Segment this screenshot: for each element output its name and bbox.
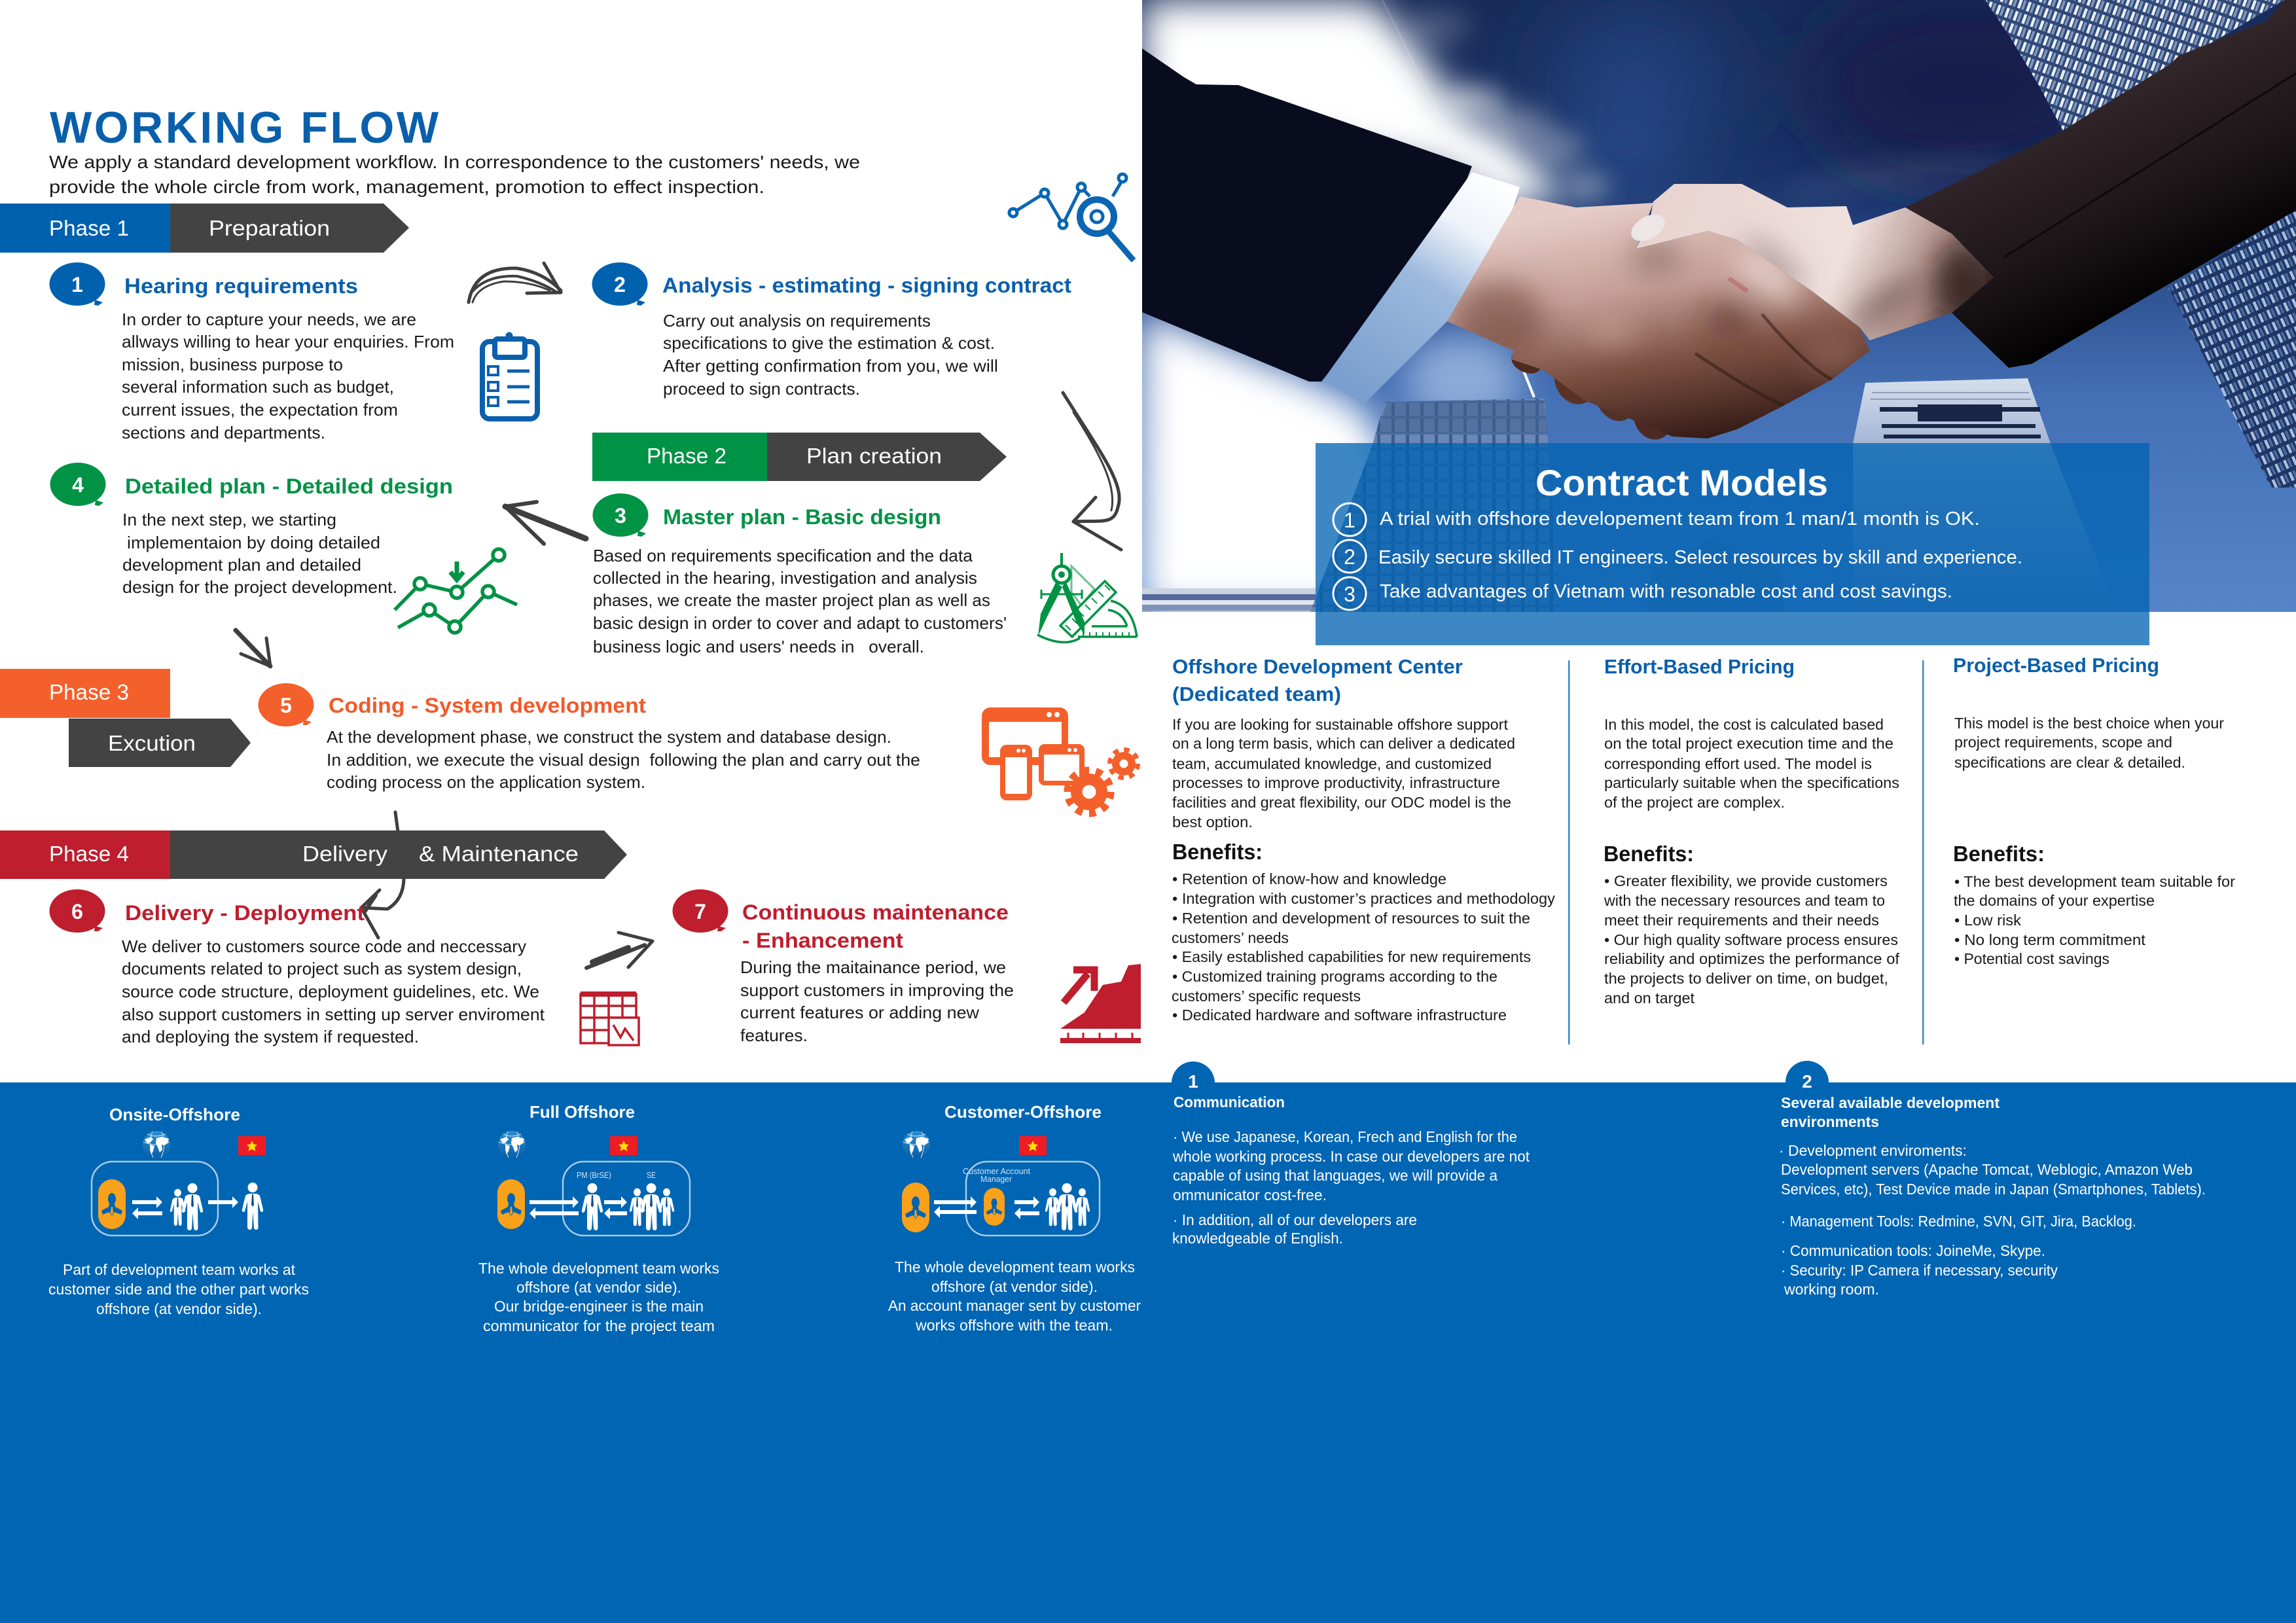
- body 1: [122, 310, 454, 442]
- phase 1 bar: Phase 1: [49, 216, 129, 240]
- body 3: [593, 546, 1007, 656]
- caption: customer side and the other part works: [48, 1281, 309, 1298]
- body 1: mission, business purpose to: [122, 355, 343, 374]
- description: corresponding effort used. The model is: [1604, 755, 1872, 772]
- item 2: Easily secure skilled IT engineers. Select resources by skill and experience.: [1378, 547, 2022, 568]
- boundary: [563, 1162, 690, 1236]
- phase 4 bar: Phase 4: [49, 842, 129, 866]
- item 2: [1333, 540, 2022, 573]
- text: knowledgeable of English.: [1172, 1230, 1343, 1247]
- right hand: [1636, 184, 1994, 340]
- intro text: provide the whole circle from work, management, promotion to effect inspection.: [49, 177, 764, 197]
- panel: blue footer band: [0, 1061, 2296, 1623]
- benefits list: • Potential cost savings: [1954, 950, 2109, 967]
- phase 4 bar: [0, 830, 627, 879]
- badge 2: [592, 262, 648, 306]
- body 2: proceed to sign contracts.: [663, 379, 860, 399]
- flag: [610, 1136, 637, 1155]
- globe: [143, 1131, 170, 1158]
- globe: [498, 1131, 526, 1158]
- benefits list: • Dedicated hardware and software infrastructure: [1172, 1007, 1507, 1024]
- caption: Our bridge-engineer is the main: [494, 1298, 704, 1315]
- body 4: design for the project development.: [122, 577, 397, 597]
- body 6: also support customers in setting up server enviroment: [122, 1005, 545, 1024]
- benefits list: [1172, 870, 1556, 1024]
- low building: [1142, 588, 1316, 611]
- diagram: onsite-offshore: [48, 1105, 309, 1317]
- description: If you are looking for sustainable offshore support: [1172, 716, 1509, 733]
- text: working room.: [1784, 1281, 1879, 1298]
- heading 3: Master plan - Basic design: [663, 505, 941, 529]
- item 1: 1: [1344, 508, 1355, 532]
- customer pill: [902, 1183, 929, 1232]
- text: · Management Tools: Redmine, SVN, GIT, Jira, Backlog.: [1781, 1213, 2136, 1230]
- body 7: current features or adding new: [740, 1003, 979, 1022]
- icon: line chart: [395, 549, 517, 633]
- phase 2 bar: Plan creation: [806, 444, 942, 468]
- role labels: Manager: [980, 1174, 1013, 1184]
- description: specifications are clear & detailed.: [1954, 754, 2185, 771]
- photo: handshake over skyscrapers: [1142, 0, 2296, 612]
- role labels: [963, 1166, 1030, 1184]
- item 3: 3: [1344, 582, 1355, 606]
- step 5: coding: [258, 683, 920, 792]
- text: · Communication tools: JoineMe, Skype.: [1781, 1242, 2045, 1259]
- customer pill: [497, 1179, 525, 1229]
- arrow: step 5 to step 6: [361, 812, 404, 938]
- body 1: current issues, the expectation from: [122, 400, 398, 419]
- heading 7: [742, 901, 1009, 952]
- icon: table with chart: [581, 994, 639, 1045]
- mid towers: [1310, 399, 1560, 612]
- icon: growth chart: [1060, 964, 1141, 1043]
- badge 7: 7: [694, 900, 706, 923]
- role labels: SE: [647, 1170, 656, 1180]
- arrows: [132, 1196, 238, 1219]
- body 3: phases, we create the master project plan as well as: [593, 590, 990, 610]
- onsite engineer: [242, 1183, 263, 1230]
- panel: contract models: [1316, 443, 2149, 645]
- intro text: [49, 152, 860, 197]
- icon: drafting tools: [1037, 553, 1137, 642]
- benefits heading: Benefits:: [1172, 840, 1263, 864]
- description: processes to improve productivity, infrastructure: [1172, 774, 1500, 791]
- caption: offshore (at vendor side).: [96, 1300, 262, 1317]
- body 2: specifications to give the estimation & cost.: [663, 333, 995, 353]
- body 7: [740, 957, 1014, 1045]
- body 1: sections and departments.: [122, 423, 325, 442]
- caption: offshore (at vendor side).: [516, 1279, 681, 1296]
- badge 7: [673, 889, 728, 933]
- caption: Part of development team works at: [63, 1261, 296, 1278]
- step 7: maintenance: [673, 889, 1014, 1045]
- text: Services, etc), Test Device made in Japan (Smartphones, Tablets).: [1781, 1181, 2206, 1198]
- phase 3 bar: Excution: [108, 731, 196, 755]
- heading 1: Hearing requirements: [124, 274, 358, 298]
- left sleeve: [1142, 48, 1472, 382]
- arrow: step 4 to step 5: [236, 630, 270, 666]
- label: Onsite-Offshore: [109, 1105, 240, 1124]
- body 6: [122, 936, 545, 1046]
- role labels: Customer Account: [963, 1166, 1030, 1176]
- description: In this model, the cost is calculated based: [1604, 716, 1884, 733]
- arrow: step 1 to step 2: [469, 263, 561, 302]
- body 7: features.: [740, 1026, 808, 1045]
- phase 1 bar: [0, 204, 409, 253]
- heading: environments: [1781, 1113, 1879, 1130]
- description: on a long term basis, which can deliver a dedicated: [1172, 735, 1515, 752]
- column: project-based pricing: [1953, 654, 2235, 967]
- badge 5: 5: [280, 694, 292, 717]
- description: [1954, 715, 2224, 771]
- caption: [888, 1258, 1141, 1334]
- number: 1: [1188, 1071, 1198, 1092]
- heading 2: Analysis - estimating - signing contract: [662, 274, 1071, 297]
- item 3: Take advantages of Vietnam with resonable cost and cost savings.: [1380, 581, 1952, 602]
- phase 4 bar: & Maintenance: [419, 842, 579, 866]
- step 4: detailed plan: [50, 463, 453, 597]
- description: This model is the best choice when your: [1954, 715, 2224, 732]
- body 6: We deliver to customers source code and neccessary: [122, 936, 526, 956]
- flag: [1019, 1136, 1047, 1155]
- team: [630, 1183, 674, 1230]
- text: whole working process. In case our developers are not: [1172, 1148, 1530, 1165]
- bridge engineer: [582, 1183, 603, 1230]
- body 6: and deploying the system if requested.: [122, 1027, 419, 1046]
- benefits heading: Benefits:: [1604, 842, 1694, 866]
- body 4: development plan and detailed: [122, 555, 361, 575]
- flag: [238, 1136, 266, 1155]
- benefits list: and on target: [1604, 990, 1695, 1007]
- caption: communicator for the project team: [483, 1317, 715, 1334]
- benefits list: • Our high quality software process ensures: [1604, 931, 1898, 948]
- body 4: implementaion by doing detailed: [127, 533, 380, 552]
- boundary: [966, 1162, 1100, 1236]
- body 4: [122, 510, 397, 597]
- text: · In addition, all of our developers are: [1173, 1211, 1417, 1228]
- text: [1779, 1142, 2206, 1298]
- item 3: [1333, 577, 1952, 610]
- boundary: [92, 1162, 218, 1236]
- benefits list: customers’ needs: [1172, 929, 1289, 946]
- badge 1: 1: [71, 273, 83, 296]
- body 3: collected in the hearing, investigation and analysis: [593, 568, 977, 588]
- step 2: analysis: [592, 262, 1071, 399]
- role labels: [577, 1170, 656, 1180]
- body 6: source code structure, deployment guidelines, etc. We: [122, 982, 539, 1001]
- body 2: [663, 311, 998, 399]
- text: Development servers (Apache Tomcat, Weblogic, Amazon Web: [1781, 1161, 2193, 1178]
- benefits list: the projects to deliver on time, on budget,: [1604, 970, 1888, 987]
- text: [1172, 1128, 1530, 1247]
- heading: contract models: Contract Models: [1535, 462, 1828, 503]
- body 3: business logic and users' needs in overall.: [593, 637, 924, 656]
- benefits list: reliability and optimizes the performance of: [1604, 950, 1900, 967]
- heading 5: Coding - System development: [329, 694, 646, 717]
- text: · We use Japanese, Korean, Frech and English for the: [1173, 1128, 1517, 1145]
- benefits list: • Retention and development of resources to suit the: [1172, 910, 1530, 927]
- heading: Effort-Based Pricing: [1604, 655, 1795, 678]
- heading: Communication: [1174, 1094, 1285, 1111]
- benefits list: • Retention of know-how and knowledge: [1172, 870, 1446, 887]
- benefits list: [1604, 872, 1900, 1007]
- description: best option.: [1172, 813, 1253, 830]
- benefits heading: Benefits:: [1953, 842, 2045, 866]
- benefits list: [1954, 873, 2235, 967]
- phase 3 bar: [0, 669, 251, 767]
- benefits list: • Low risk: [1954, 912, 2022, 929]
- column: effort-based pricing: [1604, 655, 1900, 1007]
- badge 2: 2: [614, 273, 626, 296]
- left hand: [1440, 190, 1878, 445]
- phase 4 bar: Delivery: [302, 842, 388, 866]
- benefits list: • Integration with customer’s practices and methodology: [1172, 890, 1556, 907]
- team: [170, 1183, 203, 1230]
- benefits list: • Easily established capabilities for new requirements: [1172, 948, 1531, 965]
- phase 2 bar: Phase 2: [647, 444, 726, 468]
- team: [1045, 1183, 1090, 1230]
- body 1: several information such as budget,: [122, 377, 394, 397]
- phase 1 bar: Preparation: [209, 216, 330, 240]
- description: on the total project execution time and the: [1604, 735, 1893, 752]
- icon: apps and gears: [982, 707, 1138, 813]
- caption: [48, 1261, 309, 1317]
- heading: (Dedicated team): [1172, 683, 1341, 705]
- body 5: coding process on the application system.: [327, 772, 645, 792]
- heading 6: Delivery - Deployment: [125, 901, 365, 925]
- description: particularly suitable when the specifications: [1604, 774, 1899, 791]
- benefits list: • Greater flexibility, we provide customers: [1604, 872, 1888, 889]
- body 7: During the maitainance period, we: [740, 957, 1006, 977]
- body 3: Based on requirements specification and the data: [593, 546, 973, 565]
- arrow: step 6 to step 7: [586, 933, 653, 968]
- body 7: support customers in improving the: [740, 980, 1014, 1000]
- description: project requirements, scope and: [1954, 734, 2172, 751]
- badge 6: [50, 889, 105, 933]
- badge 5: [258, 683, 314, 726]
- badge 4: [50, 463, 106, 506]
- benefits list: customers’ specific requests: [1172, 988, 1361, 1005]
- badge 6: 6: [71, 900, 83, 923]
- body 1: allways willing to hear your enquiries. From: [122, 332, 454, 351]
- badge 3: 3: [615, 504, 626, 527]
- badge 3: [593, 493, 648, 537]
- body 3: basic design in order to cover and adapt to customers': [593, 613, 1007, 633]
- body 1: In order to capture your needs, we are: [122, 310, 416, 329]
- phase 3 bar: Phase 3: [49, 680, 129, 704]
- body 2: After getting confirmation from you, we will: [663, 356, 998, 376]
- arrows: [934, 1196, 1039, 1219]
- description: [1172, 716, 1515, 830]
- caption: The whole development team works: [478, 1260, 719, 1277]
- body 5: [327, 727, 920, 792]
- benefits list: • The best development team suitable for: [1954, 873, 2235, 890]
- body 2: Carry out analysis on requirements: [663, 311, 931, 330]
- text: · Development enviroments:: [1779, 1142, 1967, 1159]
- description: team, accumulated knowledge, and customized: [1172, 755, 1492, 772]
- fingers: [1554, 378, 1668, 440]
- right sleeve: [1905, 0, 2296, 368]
- description: of the project are complex.: [1604, 794, 1785, 811]
- benefits list: • Customized training programs according to the: [1172, 968, 1498, 985]
- number: 2: [1802, 1071, 1812, 1092]
- step 1: hearing requirements: [50, 262, 454, 442]
- arrows: [529, 1196, 627, 1219]
- caption: The whole development team works: [895, 1258, 1135, 1275]
- phase 2 bar: [592, 433, 1007, 481]
- label: Customer-Offshore: [944, 1102, 1102, 1122]
- heading: Offshore Development Center: [1172, 655, 1463, 678]
- caption: [478, 1260, 719, 1334]
- body 6: documents related to project such as system design,: [122, 959, 522, 978]
- column: offshore development center: [1172, 655, 1556, 1024]
- arrow: step 3 to step 4: [505, 502, 586, 544]
- small finger: [1511, 354, 1541, 374]
- icon: clipboard: [482, 333, 537, 419]
- benefits list: meet their requirements and their needs: [1604, 912, 1879, 929]
- diagram: customer-offshore: [888, 1102, 1141, 1334]
- badge 1: [50, 262, 105, 306]
- label: Full Offshore: [529, 1102, 635, 1122]
- item 1: [1333, 503, 1980, 536]
- caption: works offshore with the team.: [915, 1317, 1113, 1334]
- title: WORKING FLOW: [50, 103, 439, 152]
- benefits list: the domains of your expertise: [1954, 892, 2155, 909]
- diagram: full offshore: [478, 1102, 719, 1334]
- benefits list: with the necessary resources and team to: [1604, 892, 1885, 909]
- description: [1604, 716, 1899, 811]
- item 2: 2: [1344, 545, 1355, 569]
- account manager pill: [984, 1188, 1005, 1226]
- customer pill: [98, 1179, 126, 1229]
- heading: Project-Based Pricing: [1953, 654, 2159, 677]
- body 5: In addition, we execute the visual design following the plan and carry out the: [327, 750, 920, 770]
- step 3: master plan: [593, 493, 1007, 656]
- benefits list: • No long term commitment: [1954, 931, 2146, 948]
- block: development environments: [1779, 1071, 2206, 1298]
- text: capable of using that languages, we will provide a: [1173, 1167, 1498, 1184]
- role labels: PM (BrSE): [577, 1170, 611, 1180]
- globe: [903, 1131, 930, 1158]
- heading 7: - Enhancement: [742, 929, 903, 952]
- badge 4: 4: [72, 473, 84, 497]
- intro text: We apply a standard development workflow. In correspondence to the customers' needs, we: [49, 152, 860, 172]
- text: · Security: IP Camera if necessary, security: [1781, 1262, 2058, 1279]
- heading: Several available development: [1781, 1094, 2000, 1111]
- step 6: delivery: [50, 889, 545, 1046]
- caption: offshore (at vendor side).: [931, 1278, 1098, 1295]
- item 1: A trial with offshore developement team from 1 man/1 month is OK.: [1380, 508, 1980, 529]
- text: ommunicator cost-free.: [1173, 1186, 1327, 1204]
- heading 7: Continuous maintenance: [742, 901, 1009, 924]
- description: facilities and great flexibility, our ODC model is the: [1172, 794, 1511, 811]
- body 5: At the development phase, we construct the system and database design.: [327, 727, 891, 747]
- body 4: In the next step, we starting: [122, 510, 336, 529]
- block: communication: [1172, 1071, 1530, 1247]
- heading: [1781, 1094, 2000, 1130]
- icon: chart with magnifier: [1009, 174, 1134, 260]
- caption: An account manager sent by customer: [888, 1297, 1141, 1314]
- thumb nail: [1631, 215, 1665, 241]
- heading 4: Detailed plan - Detailed design: [125, 474, 453, 498]
- heading: [1172, 655, 1463, 705]
- arrow: step 2 to step 3: [1063, 393, 1121, 550]
- left cuff: [1323, 172, 1520, 404]
- right towers: [1985, 0, 2284, 134]
